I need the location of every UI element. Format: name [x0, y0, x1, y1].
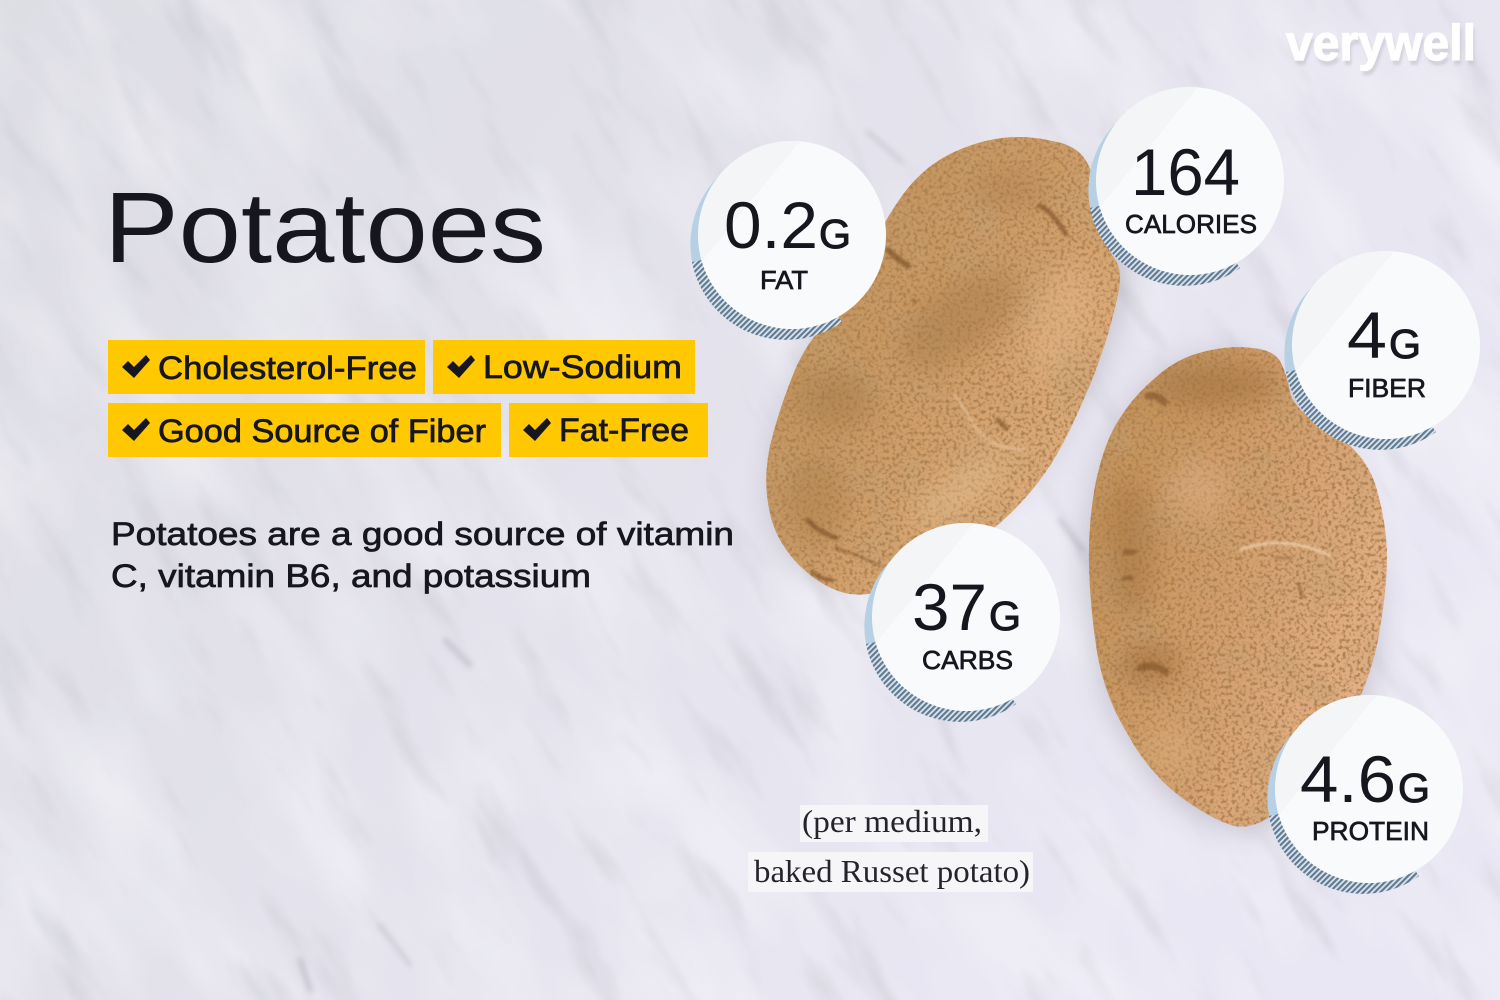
serving note: baked Russet potato)	[754, 853, 1030, 889]
badge: protein: 4.6	[1300, 742, 1396, 816]
potato shadows	[701, 102, 1398, 842]
tag: good source of fiber: Good Source of Fiber	[158, 413, 486, 449]
badge: fat	[690, 141, 886, 340]
badge: carbs: 37	[912, 570, 987, 644]
scar line	[1240, 543, 1330, 556]
badge: fiber: FIBER	[1348, 373, 1426, 403]
badge: carbs: G	[989, 593, 1021, 639]
badge: fiber: G	[1389, 321, 1421, 367]
badge: protein: G	[1398, 765, 1430, 811]
tag: cholesterol-free	[108, 340, 425, 394]
tag: fat-free: Fat-Free	[559, 412, 689, 448]
badge: fiber: 4	[1347, 298, 1387, 372]
tag: fat-free	[509, 403, 708, 457]
serving note: (per medium,	[802, 803, 982, 839]
potato: left	[766, 137, 1120, 595]
badge: carbs: CARBS	[922, 645, 1013, 675]
badge: fat: G	[819, 211, 851, 257]
scar line	[955, 395, 1025, 450]
potato: right	[1089, 347, 1387, 827]
badge: protein	[1267, 695, 1463, 894]
badge: fiber	[1284, 251, 1480, 450]
feature tags	[108, 340, 708, 457]
badge: calories: CALORIES	[1125, 209, 1257, 239]
badge: fat: FAT	[760, 265, 808, 295]
badge: calories: 164	[1131, 135, 1240, 209]
badge: protein: PROTEIN	[1312, 816, 1429, 846]
tag: low-sodium	[433, 340, 695, 394]
description: C, vitamin B6, and potassium	[111, 558, 591, 594]
skin shading	[783, 172, 1109, 546]
eye marks	[1124, 395, 1302, 672]
description: Potatoes are a good source of vitamin	[111, 516, 734, 552]
logo: verywell	[1286, 15, 1476, 71]
serving note	[748, 803, 1033, 892]
logo: verywell	[1288, 20, 1478, 76]
badge: calories	[1088, 87, 1284, 286]
badge: fat: 0.2	[724, 188, 818, 262]
tag: good source of fiber	[108, 403, 501, 457]
title: Potatoes	[104, 172, 546, 284]
tag: cholesterol-free: Cholesterol-Free	[158, 350, 417, 386]
description	[111, 516, 734, 594]
skin shading	[1106, 361, 1280, 774]
eye marks	[808, 206, 1066, 580]
tag: low-sodium: Low-Sodium	[483, 349, 682, 385]
badge: carbs	[864, 523, 1060, 722]
